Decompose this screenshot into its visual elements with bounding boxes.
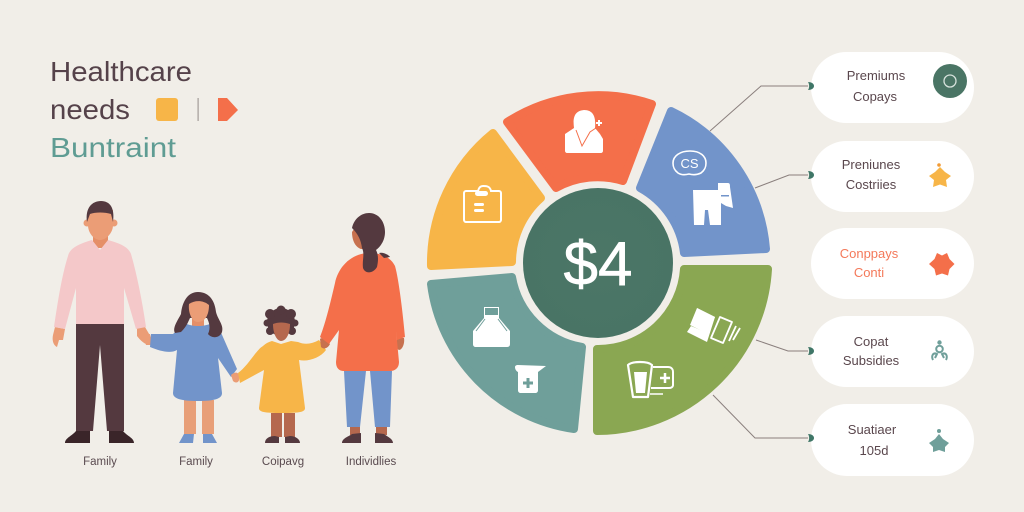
figure labels: Family <box>83 456 117 468</box>
icon: yellow square <box>156 98 178 121</box>
title: needs <box>50 94 130 125</box>
segment: green <box>597 269 768 431</box>
center value: $4 <box>564 230 632 299</box>
connector marker <box>808 347 814 355</box>
title: Healthcare <box>50 56 192 87</box>
icon: cup and box <box>628 362 673 397</box>
figure labels: Family <box>179 456 213 468</box>
segment: blue <box>640 111 766 253</box>
title: Buntraint <box>50 132 176 163</box>
icon: CS badge: CS <box>680 156 699 171</box>
icon: mortar with cross <box>515 365 546 393</box>
connector marker <box>808 82 814 90</box>
pill: Preniunes Costriies <box>808 141 974 212</box>
icon: clipboard <box>464 186 501 222</box>
pill: Suatiaer 105d: 105d <box>860 443 888 458</box>
icon: orange arrow <box>218 98 238 121</box>
title <box>50 56 192 163</box>
figure: man <box>53 201 152 443</box>
connector marker <box>808 434 814 442</box>
pill: Suatiaer 105d: Suatiaer <box>848 422 897 437</box>
figure: woman <box>320 213 405 443</box>
icon: shorts <box>693 183 733 225</box>
pill: Premiums Copays <box>808 52 974 123</box>
segment: orange <box>507 95 652 188</box>
pill: Conppays Conti <box>811 228 974 299</box>
figure: girl <box>143 292 237 443</box>
segment: yellow <box>431 133 541 266</box>
pill: Preniunes Costriies: Preniunes <box>842 157 901 172</box>
figure labels <box>83 456 396 468</box>
pill: Preniunes Costriies: Costriies <box>846 177 897 192</box>
segment: teal <box>431 277 582 429</box>
pill: Premiums Copays: Premiums <box>847 68 906 83</box>
icon: bag <box>473 307 510 347</box>
center circle <box>523 188 673 338</box>
icon: divider bar <box>198 98 199 121</box>
icon: block and phone <box>687 308 740 343</box>
pill: Suatiaer 105d <box>808 404 974 476</box>
pill: Copat Subsidies <box>808 316 974 387</box>
figure labels: Coipavg <box>262 456 304 468</box>
connector marker <box>808 171 814 179</box>
pill: Conppays Conti: Conti <box>854 265 884 280</box>
icon: CS badge <box>673 151 706 175</box>
pill: Copat Subsidies: Copat <box>854 334 889 349</box>
figure labels: Individlies <box>346 456 396 468</box>
pill: Premiums Copays: Copays <box>853 89 898 104</box>
pill: Conppays Conti: Conppays <box>840 246 899 261</box>
connector lines <box>710 86 808 438</box>
icon: doctor <box>565 110 603 153</box>
pill: Copat Subsidies: Subsidies <box>843 353 900 368</box>
figure: boy child <box>231 306 326 443</box>
donut chart <box>431 95 768 431</box>
